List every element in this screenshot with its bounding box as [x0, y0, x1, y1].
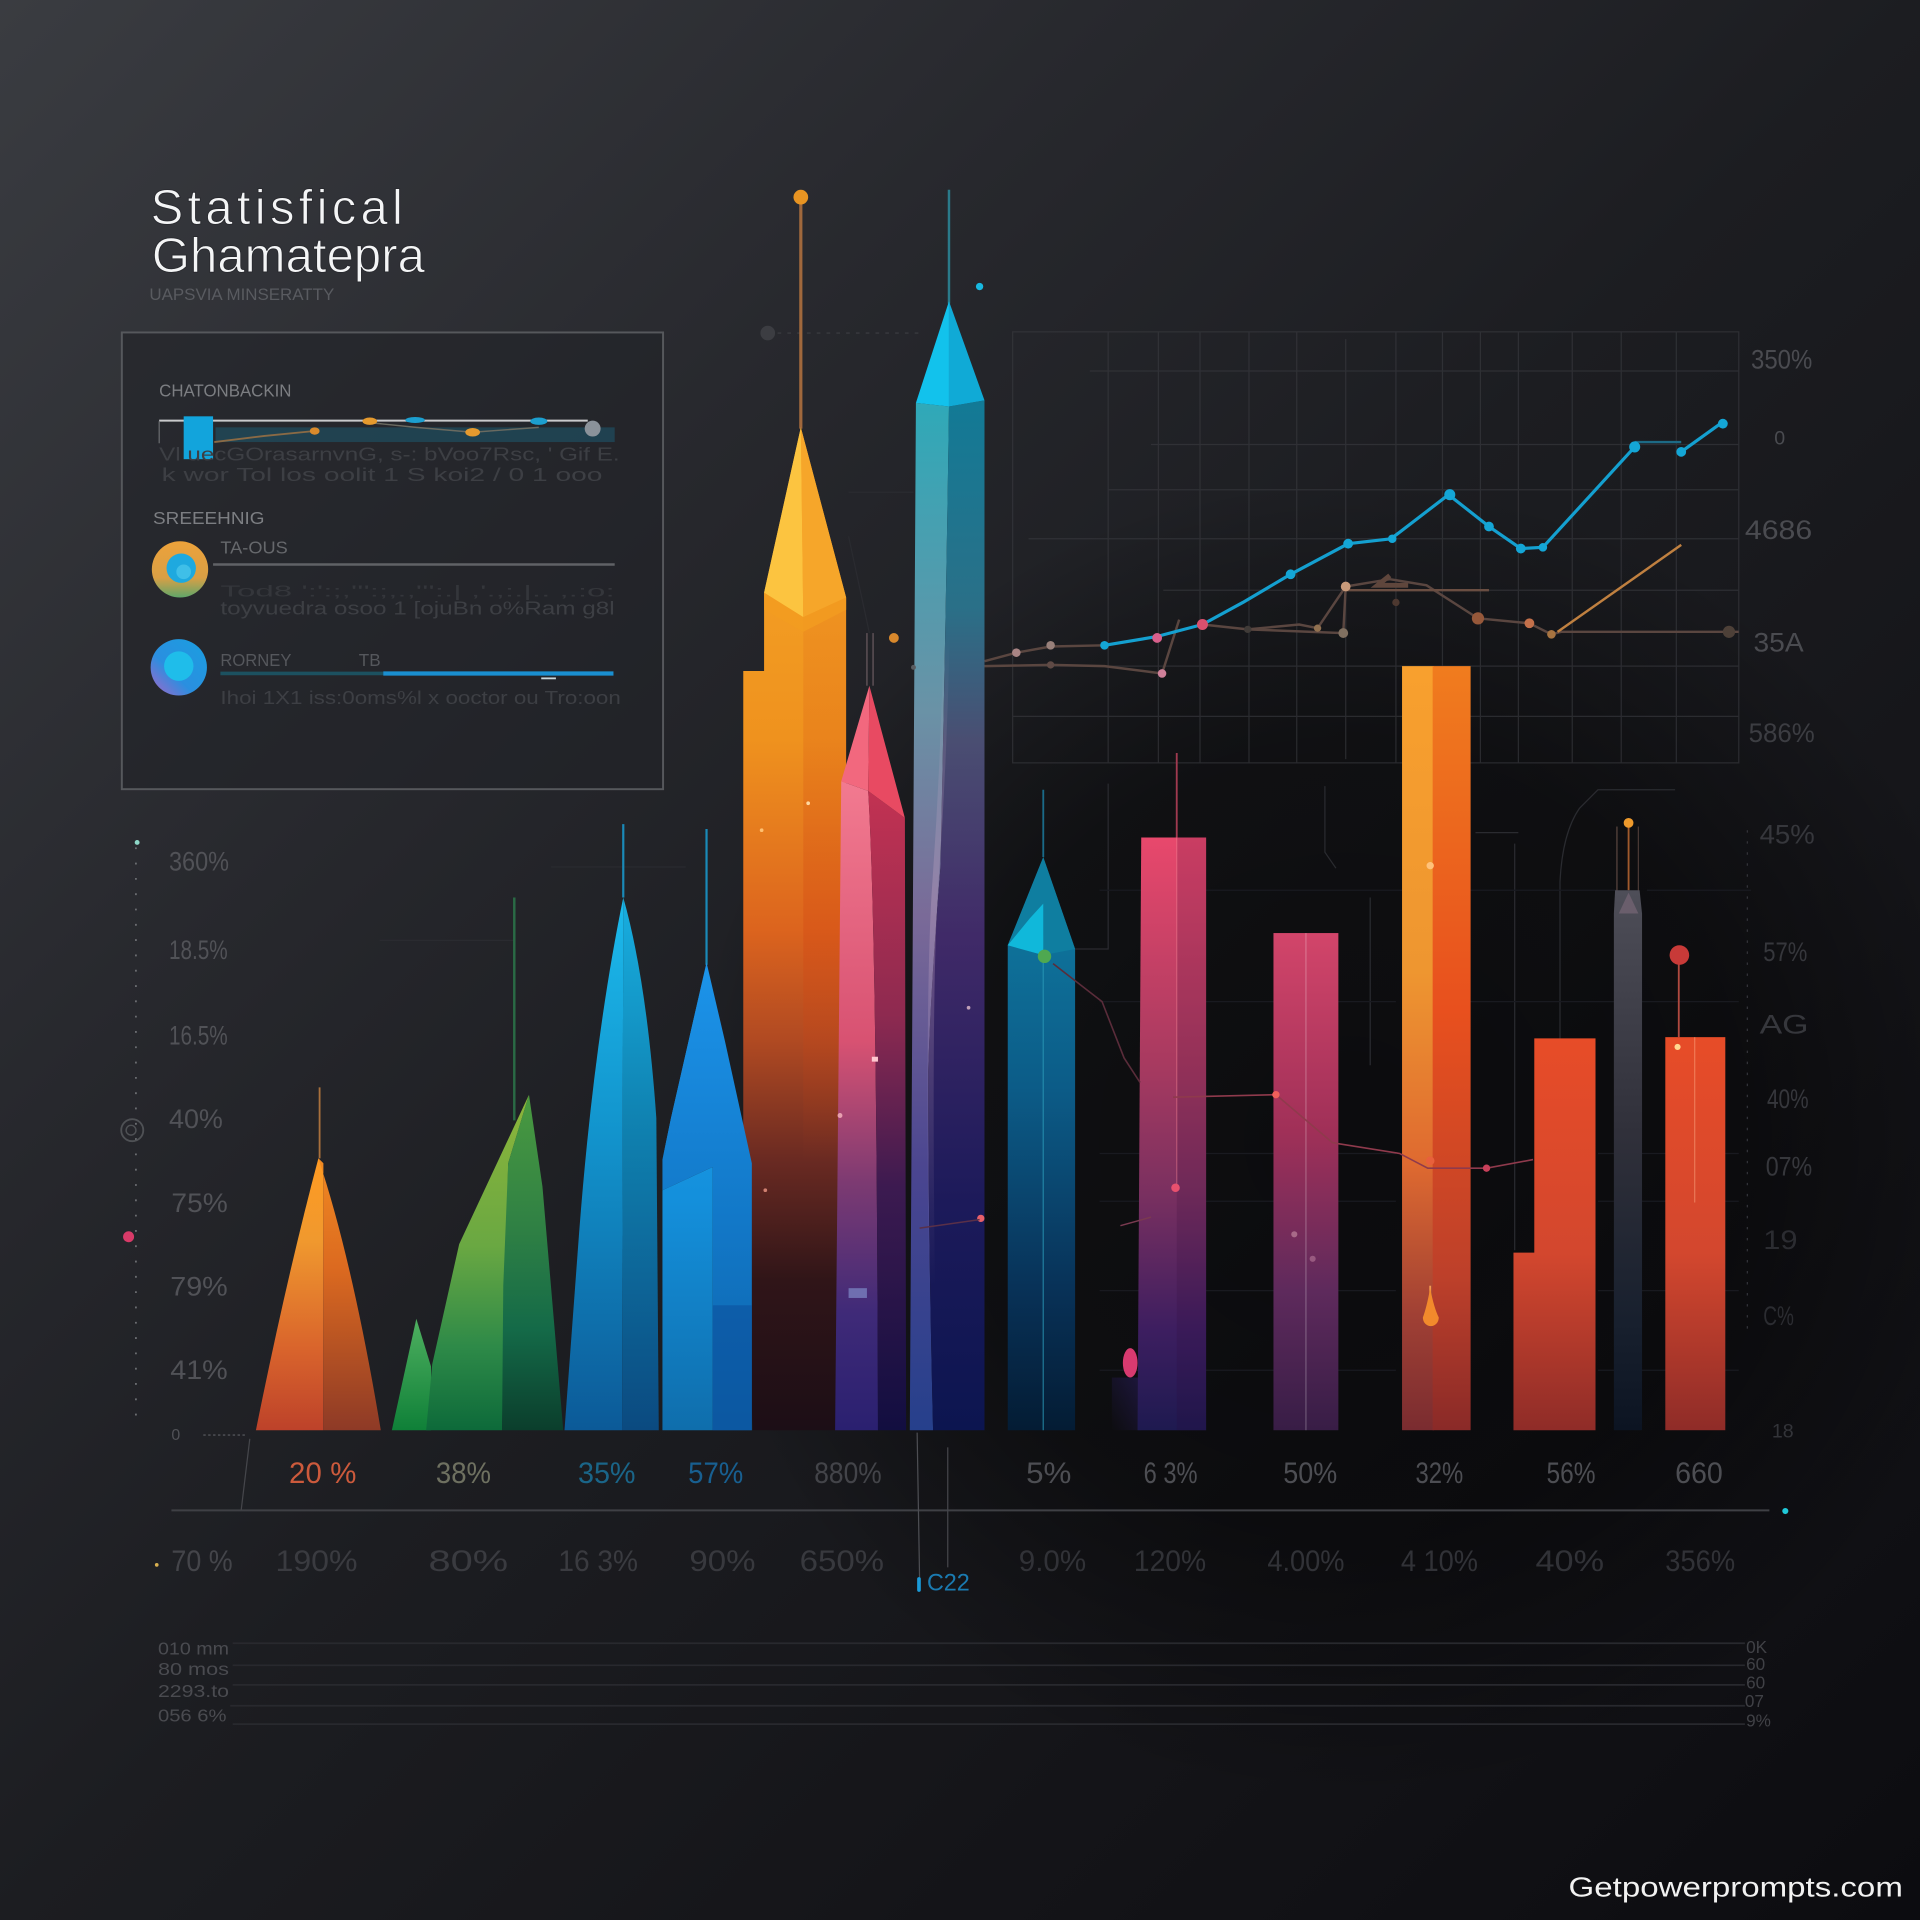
line chart axis labels: 586%: [1749, 718, 1815, 748]
footer left labels: 2293.to: [158, 1681, 229, 1701]
right axis labels: 45%: [1760, 820, 1815, 850]
value row: upper labels: 50%: [1283, 1457, 1337, 1490]
value row: upper labels: [289, 1457, 1723, 1490]
marker dot: grey: [760, 326, 775, 340]
icon: orange ring: [152, 541, 208, 598]
title: Ghamatepra: [152, 229, 426, 283]
value row: upper labels: 32%: [1416, 1457, 1463, 1490]
muted series markers: [1012, 582, 1735, 678]
line chart axis labels: 35A: [1753, 627, 1804, 657]
panel: legend: [122, 332, 663, 789]
value row: upper labels: 57%: [688, 1457, 743, 1490]
bar 14: red bar: [1665, 945, 1725, 1430]
icon: blue ring: [151, 639, 207, 696]
left axis: [121, 840, 143, 1427]
line chart: [984, 419, 1739, 678]
bar 10: rose bar: [1273, 933, 1338, 1430]
value row: upper labels: 38%: [436, 1457, 491, 1490]
right axis labels: 18: [1772, 1421, 1794, 1443]
bar 4: blue prism: [662, 829, 752, 1430]
timeline track: [159, 416, 615, 459]
value row: lower labels: 4.00%: [1267, 1545, 1344, 1578]
orange series: [1558, 545, 1681, 632]
left axis labels: 40%: [169, 1104, 223, 1134]
row: first item: [213, 537, 615, 619]
value row: upper labels: 35%: [578, 1457, 636, 1490]
value row: upper labels: 5%: [1026, 1457, 1071, 1490]
scattered data dots: [760, 283, 1316, 1298]
value row: lower labels: 4 10%: [1401, 1545, 1478, 1578]
value row: upper labels: 20 %: [289, 1457, 356, 1490]
footer right labels: 60: [1746, 1654, 1765, 1674]
section heading: SREEEHNIG: [153, 508, 264, 528]
value row: lower labels: 80%: [429, 1545, 508, 1578]
value row: lower labels: 40%: [1536, 1545, 1604, 1578]
footer right labels: 60: [1746, 1673, 1765, 1693]
value row: lower labels: C22: [927, 1570, 970, 1597]
value row: upper labels: 660: [1675, 1457, 1723, 1490]
icon: orange droplet: [1423, 1288, 1439, 1326]
left axis labels: 79%: [170, 1272, 228, 1302]
line chart axis labels: 4686: [1745, 515, 1812, 545]
value row: lower labels: 356%: [1665, 1545, 1735, 1578]
track caption text: Vl uecGOrasarnvnG, s-: bVoo7Rsc, ' Gif E.: [159, 443, 620, 464]
right axis labels: 19: [1763, 1225, 1798, 1255]
left axis labels: 16.5%: [169, 1020, 228, 1050]
subtitle: UAPSVIA MINSERATTY: [149, 285, 334, 304]
bar 9: magenta bar: [1112, 753, 1206, 1430]
panel heading: CHATONBACKIN: [159, 381, 291, 401]
muted brown series: [984, 576, 1739, 673]
line chart axis labels: 350%: [1751, 345, 1812, 375]
title: Statisfical: [151, 181, 403, 235]
bar 3: blue spike: [564, 824, 659, 1430]
blue series markers: [1100, 419, 1728, 650]
bar 13: grey spire: [1614, 818, 1642, 1430]
row: second item: Ihoi 1X1 iss:0oms%l x ooctor ou Tro:oon: [220, 687, 621, 708]
horizontal axis: [155, 1433, 1788, 1592]
value row: lower labels: [171, 1545, 1735, 1597]
row: first item: TA-OUS: [220, 537, 288, 557]
value row: lower labels: 9.0%: [1019, 1545, 1086, 1578]
value row: lower labels: 16 3%: [558, 1545, 638, 1578]
bar 2: green peaks: [392, 898, 563, 1430]
value row: lower labels: 70 %: [171, 1545, 233, 1578]
left axis labels: 18.5%: [169, 935, 228, 965]
left axis labels: 75%: [171, 1188, 228, 1218]
row: second item: [220, 650, 621, 708]
footer left labels: [158, 1638, 229, 1726]
watermark: Getpowerprompts.com: [1569, 1872, 1903, 1903]
value row: lower labels: 190%: [276, 1545, 358, 1578]
bar 12: red stepped bar: [1513, 1038, 1596, 1430]
footer right labels: 9%: [1746, 1711, 1771, 1731]
right axis labels: C%: [1763, 1301, 1794, 1331]
crossing pink trend line: [1053, 964, 1533, 1172]
footer left labels: 056 6%: [158, 1706, 227, 1726]
value row: lower labels: 90%: [689, 1545, 756, 1578]
right axis labels: AG: [1760, 1009, 1809, 1039]
bar 8: dark teal prism: [1008, 790, 1075, 1430]
left axis labels: [169, 847, 229, 1444]
bar 6: pink prism: [835, 633, 906, 1430]
row: first item: toyvuedra osoo 1 [ojuBn o%Ram g8l: [220, 598, 615, 619]
value row: upper labels: 880%: [814, 1457, 882, 1490]
footer rows: [158, 1637, 1771, 1731]
row: first item: Tod8 ':':;,''':;,.,''':.| ,'.,:.|.. ,.:o:: [220, 583, 615, 600]
icon: pink droplet: [1123, 1348, 1138, 1378]
line chart axis labels: 0: [1774, 427, 1785, 449]
track caption text: [159, 443, 620, 485]
left axis labels: 360%: [169, 847, 229, 877]
left axis labels: 41%: [170, 1355, 228, 1385]
right axis labels: 07%: [1766, 1152, 1812, 1182]
faint background connectors: [380, 333, 1751, 1370]
footer left labels: 010 mm: [158, 1638, 229, 1658]
blue series: [1104, 424, 1720, 645]
right axis labels: 57%: [1763, 937, 1807, 967]
bar 11: tall orange bar: [1402, 666, 1471, 1430]
title: [151, 181, 426, 283]
footer right labels: [1745, 1637, 1771, 1731]
value row: upper labels: 56%: [1547, 1457, 1596, 1490]
row: second item: TB: [359, 650, 381, 670]
value row: lower labels: 650%: [800, 1545, 884, 1578]
value row: lower labels: 120%: [1134, 1545, 1206, 1578]
footer left labels: 80 mos: [158, 1659, 229, 1679]
bar 5: tall orange tower: [743, 190, 846, 1430]
row: second item: RORNEY: [220, 650, 292, 670]
line chart axis labels: [1745, 345, 1815, 748]
footer right labels: 07: [1745, 1691, 1764, 1711]
right axis labels: [1760, 820, 1815, 1443]
bar 1: orange cone: [256, 1087, 381, 1430]
footer right labels: 0K: [1746, 1637, 1768, 1657]
value row: upper labels: 6 3%: [1144, 1457, 1198, 1490]
right axis labels: 40%: [1767, 1084, 1809, 1114]
track caption text: k wor Tol los oolit 1 S koi2 / 0 1 ooo: [162, 464, 602, 485]
left axis labels: 0: [171, 1427, 180, 1444]
line chart grid: [1013, 332, 1739, 763]
bar 7: tallest teal column: [910, 190, 984, 1430]
